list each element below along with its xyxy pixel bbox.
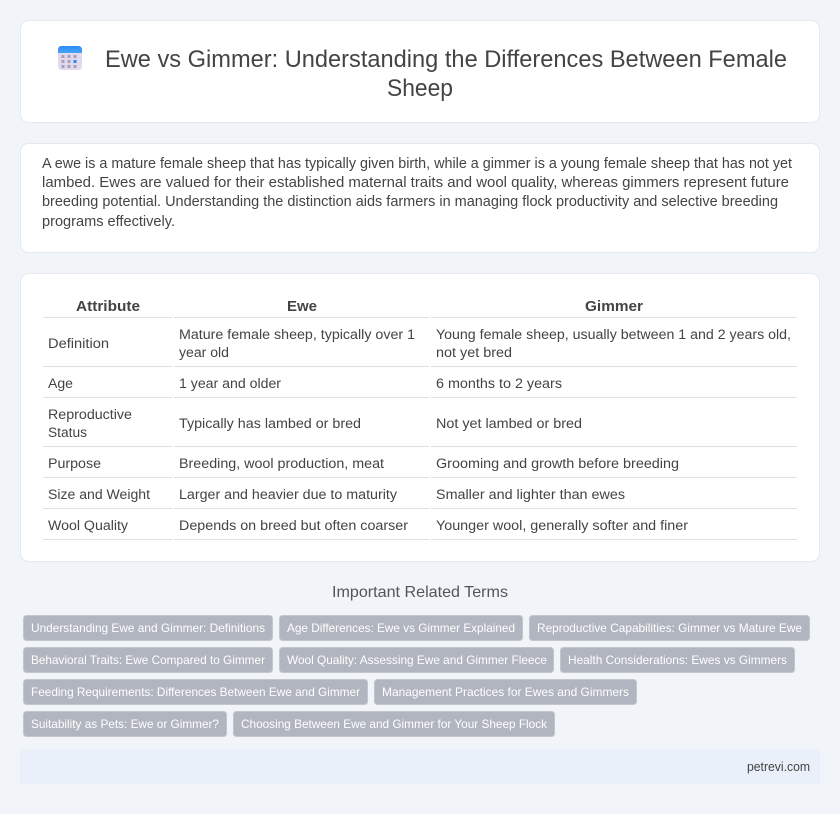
title xyxy=(105,46,787,102)
intro paragraph xyxy=(42,156,792,230)
row: reproductive status: Reproductive xyxy=(48,407,132,423)
tag xyxy=(374,680,636,704)
row: definition: year old xyxy=(179,345,229,361)
tag xyxy=(530,616,810,640)
tag xyxy=(24,648,272,672)
tag: Understanding Ewe and Gimmer: Definitions xyxy=(31,621,265,635)
row: purpose: Grooming and growth before breeding xyxy=(436,456,679,472)
row: age xyxy=(48,376,562,392)
tag: Health Considerations: Ewes vs Gimmers xyxy=(568,653,787,667)
row: reproductive status xyxy=(48,407,582,441)
row: wool quality: Depends on breed but often coarser xyxy=(179,518,408,534)
row: age: 6 months to 2 years xyxy=(436,376,562,392)
row: size and weight: Larger and heavier due to maturity xyxy=(179,487,398,503)
heading: related terms: Important Related Terms xyxy=(332,584,508,601)
row: definition: Definition xyxy=(48,336,109,352)
intro paragraph: breeding potential. Understanding the distinction aids farmers in managing flock productivity and selective breeding xyxy=(42,194,778,210)
table header: Gimmer xyxy=(585,298,643,315)
row: definition: not yet bred xyxy=(436,345,512,361)
tag: Choosing Between Ewe and Gimmer for Your Sheep Flock xyxy=(241,717,548,731)
panel: intro text xyxy=(20,144,820,252)
tag: Behavioral Traits: Ewe Compared to Gimmer xyxy=(31,653,265,667)
tag xyxy=(24,616,272,640)
tag xyxy=(280,648,554,672)
intro paragraph: programs effectively. xyxy=(42,214,175,230)
tag: Wool Quality: Assessing Ewe and Gimmer Fleece xyxy=(287,653,547,667)
row: purpose xyxy=(48,456,679,472)
tag: Age Differences: Ewe vs Gimmer Explained xyxy=(287,621,515,635)
table header: Attribute xyxy=(76,298,140,315)
title: Sheep xyxy=(387,75,453,102)
row: definition xyxy=(48,327,791,361)
tag xyxy=(560,648,794,672)
row: wool quality xyxy=(48,518,688,534)
row: age: Age xyxy=(48,376,73,392)
panel: comparison table xyxy=(20,274,820,562)
row: definition: Young female sheep, usually between 1 and 2 years old, xyxy=(436,327,791,343)
panel: title xyxy=(20,20,820,122)
footer xyxy=(20,750,820,784)
tag: Feeding Requirements: Differences Between Ewe and Gimmer xyxy=(31,685,360,699)
tag xyxy=(280,616,522,640)
row: reproductive status: Status xyxy=(48,425,87,441)
row: definition: Mature female sheep, typically over 1 xyxy=(179,327,415,343)
tag xyxy=(24,680,368,704)
row: size and weight xyxy=(48,487,625,503)
row: reproductive status: Not yet lambed or bred xyxy=(436,416,582,432)
tag: Reproductive Capabilities: Gimmer vs Mature Ewe xyxy=(537,621,802,635)
row: age: 1 year and older xyxy=(179,376,281,392)
tag: Suitability as Pets: Ewe or Gimmer? xyxy=(31,717,219,731)
footer: petrevi.com xyxy=(747,760,810,774)
intro paragraph: lambed. Ewes are valued for their established maternal traits and wool quality, whereas gimmers represent future xyxy=(42,175,789,191)
icon: calendar xyxy=(58,46,82,70)
row: size and weight: Smaller and lighter than ewes xyxy=(436,487,625,503)
row: wool quality: Wool Quality xyxy=(48,518,129,534)
row: wool quality: Younger wool, generally softer and finer xyxy=(436,518,688,534)
tag xyxy=(24,712,226,736)
table header xyxy=(76,298,643,315)
tag: Management Practices for Ewes and Gimmers xyxy=(382,685,629,699)
related term tags xyxy=(24,616,810,736)
row: purpose: Purpose xyxy=(48,456,101,472)
row: reproductive status: Typically has lambed or bred xyxy=(179,416,361,432)
table header: Ewe xyxy=(287,298,317,315)
tag xyxy=(234,712,554,736)
row: size and weight: Size and Weight xyxy=(48,487,150,503)
title: Ewe vs Gimmer: Understanding the Differences Between Female xyxy=(105,46,787,73)
intro paragraph: A ewe is a mature female sheep that has typically given birth, while a gimmer is a young female sheep that has not yet xyxy=(42,156,792,172)
row: purpose: Breeding, wool production, meat xyxy=(179,456,384,472)
